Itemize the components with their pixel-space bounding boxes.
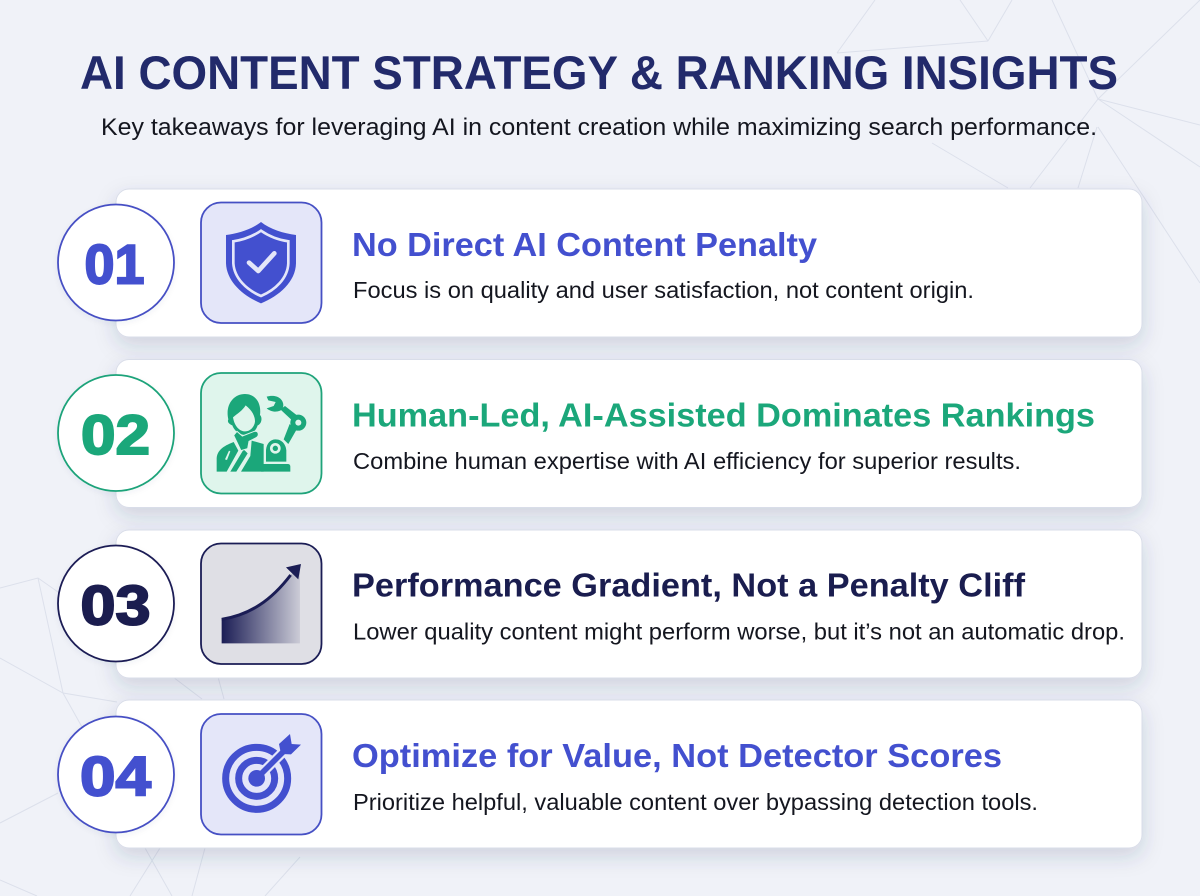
description 02: Combine human expertise with AI efficiency for superior results. xyxy=(353,448,1021,474)
icon: shield with check xyxy=(201,202,322,323)
description 03: Lower quality content might perform worse, but it’s not an automatic drop. xyxy=(353,618,1125,644)
panel: card 02 xyxy=(58,360,1142,508)
number badge 04 xyxy=(58,716,174,832)
number badge 03 xyxy=(58,546,174,662)
subtitle: Key takeaways for leveraging AI in content creation while maximizing search performance. xyxy=(101,114,1097,141)
heading 04: Optimize for Value, Not Detector Scores xyxy=(352,737,1002,774)
heading 03: Performance Gradient, Not a Penalty Cliff xyxy=(352,566,1026,604)
icon: human and robot arm xyxy=(201,373,322,494)
number badge 02 xyxy=(58,375,174,491)
panel: card 01 xyxy=(58,189,1142,337)
number badge 03: 03 xyxy=(80,574,150,636)
icon: target with arrow xyxy=(201,714,322,834)
description 04: Prioritize helpful, valuable content over bypassing detection tools. xyxy=(353,789,1038,815)
number badge 04: 04 xyxy=(80,744,151,808)
heading 01: No Direct AI Content Penalty xyxy=(352,226,818,263)
number badge 02: 02 xyxy=(81,403,150,466)
number badge 01 xyxy=(58,204,174,320)
panel: card 03 xyxy=(58,530,1142,678)
description 01: Focus is on quality and user satisfaction, not content origin. xyxy=(353,277,974,303)
title: AI CONTENT STRATEGY & RANKING INSIGHTS xyxy=(80,46,1118,99)
heading 02: Human-Led, AI-Assisted Dominates Rankings xyxy=(352,396,1095,434)
panel: card 04 xyxy=(58,700,1142,848)
number badge 01: 01 xyxy=(84,232,144,296)
icon: rising gradient chart xyxy=(201,544,322,664)
